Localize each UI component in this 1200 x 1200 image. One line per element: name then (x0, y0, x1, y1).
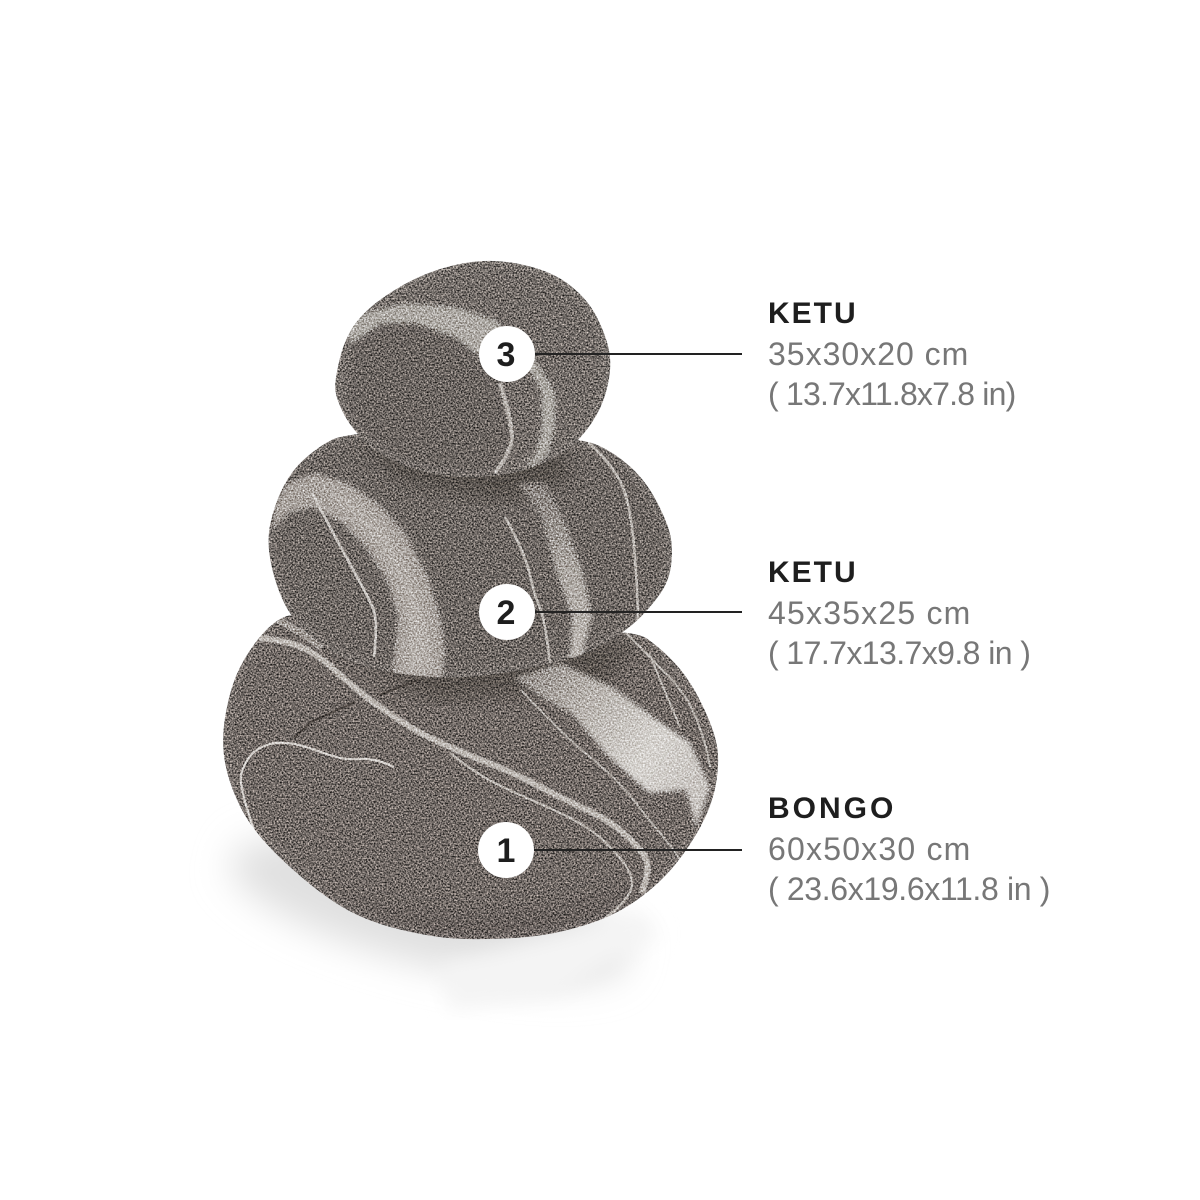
label: stone 1 dimensions: ( 23.6x19.6x11.8 in ) (768, 871, 1050, 907)
label: stone 2 dimensions: KETU (768, 556, 858, 589)
marker 3 (479, 326, 535, 382)
label: stone 1 dimensions: BONGO (768, 792, 896, 825)
marker 2 (479, 584, 535, 640)
label: stone 1 dimensions (768, 792, 1050, 907)
label: stone 3 dimensions: 35x30x20 cm (768, 336, 969, 372)
marker 3: 3 (497, 336, 515, 374)
label: stone 1 dimensions: 60x50x30 cm (768, 831, 972, 867)
stacked stone illustration (223, 260, 742, 1002)
label: stone 3 dimensions: ( 13.7x11.8x7.8 in) (768, 376, 1015, 412)
stone 2: Ketu (268, 434, 672, 678)
label: stone 3 dimensions (768, 297, 1015, 412)
stone 3: Ketu (335, 260, 610, 478)
marker 1 (478, 822, 534, 878)
leader line 1 (506, 849, 742, 851)
stone 1: Bongo (223, 615, 718, 940)
leader line 2 (507, 611, 742, 613)
marker 1: 1 (497, 832, 515, 870)
label: stone 2 dimensions: ( 17.7x13.7x9.8 in ) (768, 635, 1030, 671)
marker 2: 2 (497, 594, 515, 632)
shadow and reflection under stones (218, 807, 660, 1013)
label: stone 2 dimensions (768, 556, 1030, 671)
leader line 3 (507, 353, 742, 355)
label: stone 2 dimensions: 45x35x25 cm (768, 595, 972, 631)
label: stone 3 dimensions: KETU (768, 297, 858, 330)
